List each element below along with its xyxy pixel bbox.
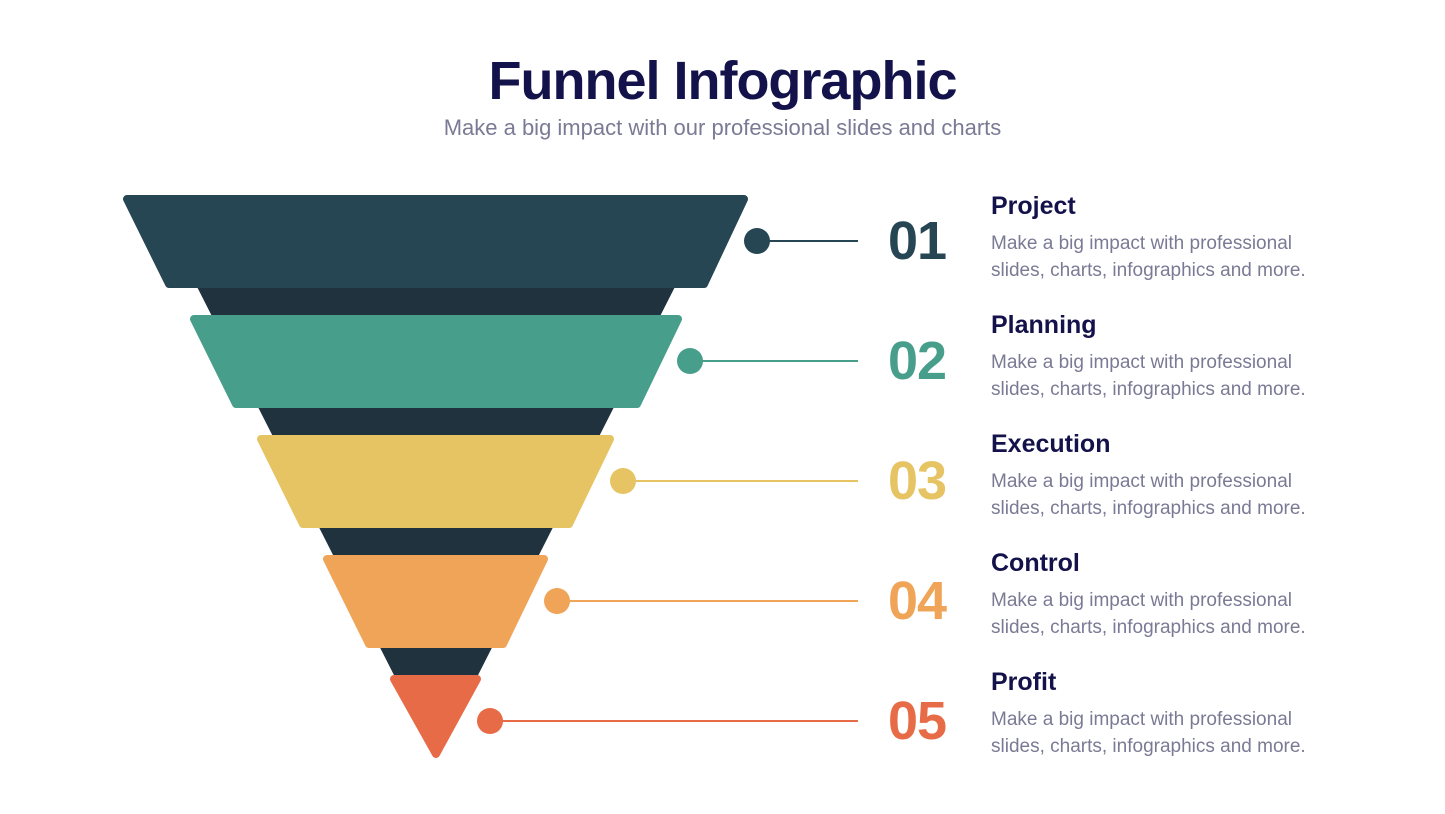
item 1 text: Make a big impact with professional [991, 233, 1292, 254]
band 1 [127, 199, 744, 284]
item 3 text: slides, charts, infographics and more. [991, 498, 1306, 519]
item 4 text: Control [991, 549, 1080, 577]
band 5 [394, 679, 477, 754]
item 1 text: Project [991, 192, 1076, 220]
connector 3 [610, 468, 858, 494]
item 5 text [991, 668, 1306, 757]
item 1 text [991, 192, 1306, 281]
item 5 text: Make a big impact with professional [991, 709, 1292, 730]
band 2 [194, 319, 678, 404]
number 04: 04 [888, 571, 946, 631]
item 3 text: Make a big impact with professional [991, 471, 1292, 492]
item 1 text: slides, charts, infographics and more. [991, 260, 1306, 281]
number 01: 01 [888, 211, 946, 271]
item 4 text: Make a big impact with professional [991, 590, 1292, 611]
title: Funnel Infographic [488, 51, 956, 111]
number 05: 05 [888, 691, 946, 751]
item 2 text [991, 311, 1306, 400]
item 2 text: Make a big impact with professional [991, 352, 1292, 373]
connector 2 [677, 348, 858, 374]
connector 4 [544, 588, 858, 614]
item 5 text: Profit [991, 668, 1056, 696]
item 2 text: slides, charts, infographics and more. [991, 379, 1306, 400]
item 3 text [991, 430, 1306, 519]
item 2 text: Planning [991, 311, 1097, 339]
number 02: 02 [888, 331, 946, 391]
connector 1 [744, 228, 858, 254]
band 4 [327, 559, 544, 644]
connector 5 [477, 708, 858, 734]
item 4 text [991, 549, 1306, 638]
subtitle: Make a big impact with our professional slides and charts [444, 115, 1001, 140]
band 3 [261, 439, 610, 524]
number 03: 03 [888, 451, 946, 511]
funnel core [153, 200, 719, 758]
item 4 text: slides, charts, infographics and more. [991, 617, 1306, 638]
item 3 text: Execution [991, 430, 1110, 458]
item 5 text: slides, charts, infographics and more. [991, 736, 1306, 757]
